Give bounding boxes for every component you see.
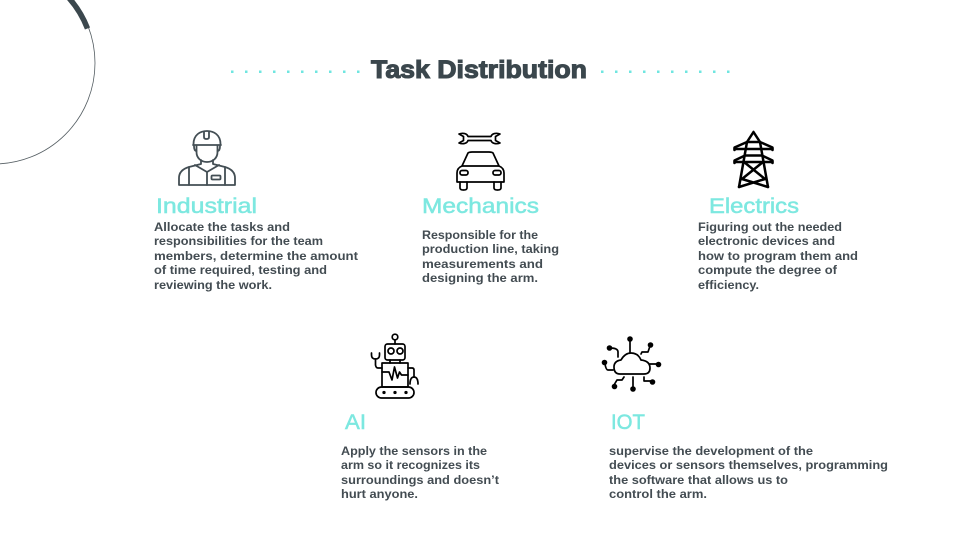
heading: Mechanics: Mechanics <box>422 195 539 218</box>
panel: Mechanics <box>422 133 559 285</box>
panel: AI <box>341 334 499 501</box>
icon: cloud network nodes <box>602 336 661 392</box>
panel: Electrics <box>698 132 858 292</box>
text: Industrial description: reviewing the work. <box>154 278 272 292</box>
icon: robot <box>372 334 418 398</box>
text: IOT description: supervise the development of the <box>609 444 813 458</box>
text: AI description: Apply the sensors in the <box>341 444 487 458</box>
text: Industrial description: responsibilities for the team <box>154 234 323 248</box>
text: Electrics description: compute the degree of <box>698 263 838 277</box>
text: Industrial description: of time required, testing and <box>154 263 327 277</box>
panel: IOT <box>602 336 888 501</box>
text: Mechanics description: Responsible for the <box>422 228 538 242</box>
text: Industrial description <box>154 220 358 292</box>
heading: IOT: IOT <box>611 411 645 434</box>
heading: AI: AI <box>345 411 366 434</box>
text: Industrial description: Allocate the tasks and <box>154 220 290 234</box>
text: Mechanics description: designing the arm. <box>422 271 538 285</box>
text: IOT description: control the arm. <box>609 487 707 501</box>
decorative circle outline <box>0 0 95 164</box>
text: Electrics description: efficiency. <box>698 278 759 292</box>
text: Mechanics description: production line, taking <box>422 242 559 256</box>
text: Electrics description: Figuring out the needed <box>698 220 842 234</box>
icon: connected cloud <box>605 339 658 388</box>
text: IOT description: the software that allows us to <box>609 473 788 487</box>
panel: Industrial <box>154 131 358 292</box>
text: IOT description <box>609 444 888 501</box>
icon: wrench above car <box>457 133 504 190</box>
text: AI description: surroundings and doesn’t <box>341 473 499 487</box>
text: Mechanics description <box>422 228 559 285</box>
icon: transmission tower <box>734 132 772 187</box>
text: Electrics description <box>698 220 858 292</box>
text: AI description: hurt anyone. <box>341 487 418 501</box>
icon: construction worker <box>179 131 235 185</box>
title: Task Distribution <box>371 56 587 84</box>
heading: Industrial: Industrial <box>156 195 257 218</box>
text: Mechanics description: measurements and <box>422 257 543 271</box>
text: AI description: arm so it recognizes its <box>341 458 480 472</box>
text: AI description <box>341 444 499 501</box>
text: Industrial description: members, determine the amount <box>154 249 358 263</box>
text: Electrics description: how to program them and <box>698 249 858 263</box>
heading: Electrics: Electrics <box>709 195 799 218</box>
text: IOT description: devices or sensors themselves, programming <box>609 458 888 472</box>
dotted title rule <box>231 70 730 73</box>
text: Electrics description: electronic devices and <box>698 234 835 248</box>
